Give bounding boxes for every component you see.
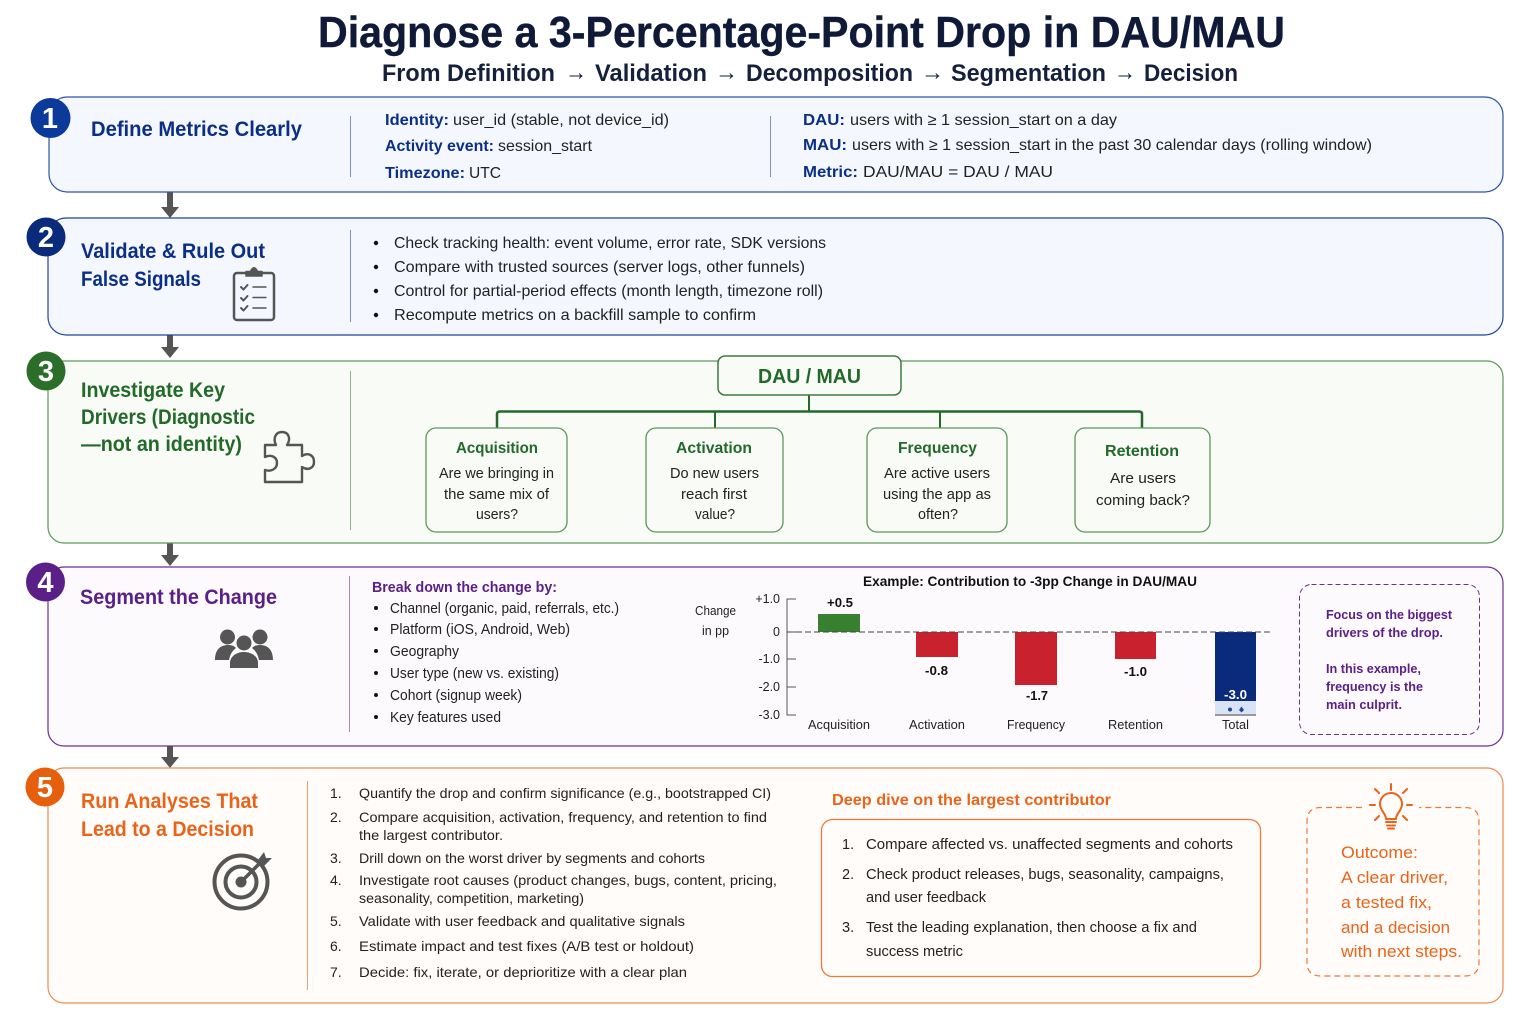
- subtitle: From Definition: [382, 60, 555, 87]
- bar: retention: Retention: [1108, 718, 1163, 732]
- icon: target with arrow: [214, 852, 272, 908]
- checklist bullets: Check tracking health: event volume, error rate, SDK versions: [394, 235, 826, 252]
- bar: frequency: -1.7: [1026, 689, 1048, 703]
- outcome callout: [1307, 784, 1479, 976]
- segmentation list: Cohort (signup week): [390, 688, 522, 704]
- definitions: DAU, MAU, metric: [803, 112, 1372, 181]
- icon: lightbulb: [1370, 784, 1412, 828]
- arrow: step 2 to 3: [161, 335, 179, 358]
- heading: False Signals: [81, 268, 201, 291]
- driver card: frequency: Frequency: [898, 440, 977, 457]
- heading: Segment the Change: [80, 586, 277, 609]
- step number 5: [26, 768, 64, 806]
- y axis: [755, 592, 796, 722]
- numbered analysis steps: [330, 785, 777, 980]
- numbered analysis steps: 2.: [330, 809, 342, 825]
- numbered analysis steps: Investigate root causes (product changes, bugs, content, pricing,: [359, 872, 777, 888]
- bar: activation: -0.8: [925, 664, 948, 678]
- definitions: DAU, MAU, metric: DAU/MAU = DAU / MAU: [863, 164, 1053, 181]
- callout: focus on biggest drivers: [1300, 584, 1480, 734]
- driver card: frequency: often?: [918, 506, 958, 523]
- driver card: activation: Do new users: [670, 465, 759, 482]
- step number 4: 4: [37, 567, 54, 599]
- bar: activation: [909, 632, 965, 732]
- outcome callout: Outcome:: [1341, 843, 1418, 862]
- numbered analysis steps: the largest contributor.: [359, 827, 503, 843]
- outcome callout: A clear driver,: [1341, 868, 1448, 887]
- callout: focus on biggest drivers: main culprit.: [1326, 697, 1402, 712]
- driver card: frequency: Are active users: [884, 465, 990, 482]
- icon: puzzle piece: [265, 432, 314, 482]
- deep dive box: 2.: [842, 867, 854, 883]
- y axis: -2.0: [758, 680, 780, 694]
- driver card: activation: [646, 428, 783, 532]
- outcome callout: a tested fix,: [1341, 893, 1432, 912]
- segmentation list: Key features used: [390, 710, 501, 726]
- bar: acquisition: +0.5: [827, 596, 853, 610]
- panel 2: validate: [26, 218, 1503, 335]
- bar: acquisition: [808, 596, 870, 732]
- title: Diagnose a 3-Percentage-Point Drop in DAU/MAU: [318, 8, 1285, 57]
- bar: acquisition: Acquisition: [808, 718, 870, 732]
- deep dive box: Test the leading explanation, then choose a fix and: [866, 920, 1197, 936]
- callout: focus on biggest drivers: In this example,: [1326, 661, 1421, 676]
- y axis: 0: [773, 625, 780, 639]
- heading: Drivers (Diagnostic: [81, 406, 255, 429]
- heading: —not an identity): [81, 433, 242, 456]
- deep dive heading: Deep dive on the largest contributor: [832, 792, 1111, 809]
- driver card: acquisition: Acquisition: [456, 440, 538, 457]
- callout: focus on biggest drivers: frequency is the: [1326, 679, 1423, 694]
- checklist bullets: Recompute metrics on a backfill sample to confirm: [394, 307, 756, 324]
- bar chart: contribution to change: [695, 573, 1271, 732]
- driver card: retention: coming back?: [1096, 492, 1190, 509]
- outcome callout: with next steps.: [1340, 942, 1462, 961]
- definitions: identity, event, timezone: session_start: [498, 138, 593, 155]
- bar: total: Total: [1222, 718, 1249, 732]
- subtitle: Validation: [595, 60, 707, 87]
- heading: Define Metrics Clearly: [91, 118, 302, 141]
- checklist bullets: [374, 235, 826, 324]
- checklist bullets: Control for partial-period effects (month length, timezone roll): [394, 283, 823, 300]
- definitions: identity, event, timezone: UTC: [469, 165, 501, 182]
- subtitle: →: [1114, 59, 1136, 86]
- definitions: DAU, MAU, metric: users with ≥ 1 session_start in the past 30 calendar days (rolling window): [852, 137, 1372, 154]
- numbered analysis steps: Decide: fix, iterate, or deprioritize with a clear plan: [359, 964, 687, 980]
- numbered analysis steps: 7.: [330, 964, 342, 980]
- step number 2: 2: [38, 222, 54, 254]
- segmentation list: Geography: [390, 644, 460, 660]
- definitions: DAU, MAU, metric: DAU:: [803, 112, 845, 129]
- numbered analysis steps: 3.: [330, 850, 342, 866]
- definitions: DAU, MAU, metric: Metric:: [803, 164, 858, 181]
- heading: [81, 379, 255, 456]
- tree root: DAU / MAU: DAU / MAU: [758, 366, 861, 388]
- numbered analysis steps: Drill down on the worst driver by segments and cohorts: [359, 850, 705, 866]
- deep dive box: success metric: [866, 944, 963, 960]
- panel 4: segment: [26, 562, 1503, 746]
- heading: [81, 790, 258, 841]
- numbered analysis steps: 4.: [330, 872, 342, 888]
- bar: total: -3.0: [1224, 688, 1247, 702]
- driver card: acquisition: the same mix of: [444, 486, 550, 503]
- deep dive box: and user feedback: [866, 890, 987, 906]
- bar: frequency: Frequency: [1007, 718, 1066, 732]
- driver card: activation: reach first: [681, 486, 748, 503]
- bar: total: [1215, 632, 1256, 732]
- definitions: DAU, MAU, metric: MAU:: [803, 137, 847, 154]
- driver card: acquisition: Are we bringing in: [439, 465, 554, 482]
- driver card: retention: [1075, 428, 1210, 532]
- y axis: -1.0: [758, 652, 780, 666]
- driver card: activation: value?: [695, 506, 735, 523]
- arrow: step 4 to 5: [161, 746, 179, 768]
- numbered analysis steps: Quantify the drop and confirm significance (e.g., bootstrapped CI): [359, 785, 771, 801]
- deep dive box: Check product releases, bugs, seasonality, campaigns,: [866, 867, 1224, 883]
- chart title: Example: Contribution to -3pp Change in DAU/MAU: [863, 573, 1197, 589]
- driver card: acquisition: [426, 428, 567, 532]
- numbered analysis steps: 1.: [330, 785, 342, 801]
- segmentation list: Channel (organic, paid, referrals, etc.): [390, 601, 619, 617]
- y axis: -3.0: [758, 708, 780, 722]
- tree connectors: [497, 395, 1142, 429]
- subtitle: →: [565, 59, 587, 86]
- definitions: identity, event, timezone: Timezone:: [385, 165, 465, 182]
- step number 3: 3: [38, 356, 54, 388]
- step number 4: [26, 562, 65, 602]
- step number 1: [30, 98, 70, 138]
- bar: activation: Activation: [909, 718, 965, 732]
- bar: retention: -1.0: [1124, 665, 1147, 679]
- segmentation list: [372, 580, 619, 726]
- numbered analysis steps: Estimate impact and test fixes (A/B test or holdout): [359, 938, 694, 954]
- driver card: acquisition: users?: [476, 506, 518, 523]
- y axis: +1.0: [755, 592, 780, 606]
- segmentation list: Platform (iOS, Android, Web): [390, 622, 570, 638]
- outcome callout: and a decision: [1341, 918, 1450, 937]
- step number 5: 5: [37, 772, 53, 804]
- segmentation list: Break down the change by:: [372, 580, 557, 596]
- heading: [81, 240, 265, 291]
- definitions: DAU, MAU, metric: users with ≥ 1 session_start on a day: [850, 112, 1117, 129]
- arrow: step 3 to 4: [161, 543, 179, 566]
- y axis title: in pp: [702, 624, 729, 638]
- heading: Investigate Key: [81, 379, 225, 402]
- deep dive box: Compare affected vs. unaffected segments and cohorts: [866, 837, 1233, 853]
- definitions: identity, event, timezone: Identity:: [385, 112, 449, 129]
- driver card: activation: Activation: [676, 440, 752, 457]
- panel 3: investigate drivers: [26, 352, 1503, 543]
- numbered analysis steps: Validate with user feedback and qualitative signals: [359, 913, 685, 929]
- heading: Validate & Rule Out: [81, 240, 265, 263]
- y axis title: [695, 604, 736, 638]
- driver card: retention: Retention: [1105, 443, 1179, 460]
- y axis title: Change: [695, 604, 736, 618]
- driver card: frequency: [867, 428, 1007, 532]
- bar: frequency: [1007, 632, 1066, 732]
- heading: Run Analyses That: [81, 790, 258, 813]
- subtitle: [382, 59, 1238, 87]
- icon: group of people: [215, 630, 273, 668]
- numbered analysis steps: 5.: [330, 913, 342, 929]
- definitions: identity, event, timezone: [385, 112, 669, 182]
- panel 5: run analyses: [26, 768, 1503, 1003]
- bar: retention: [1108, 632, 1163, 732]
- numbered analysis steps: Compare acquisition, activation, frequency, and retention to find: [359, 809, 767, 825]
- step number 2: [26, 218, 66, 256]
- arrow: step 1 to 2: [161, 192, 179, 218]
- definitions: identity, event, timezone: user_id (stable, not device_id): [453, 112, 669, 129]
- deep dive box: [822, 820, 1260, 976]
- subtitle: →: [715, 59, 738, 86]
- deep dive box: 3.: [842, 920, 854, 936]
- step number 1: 1: [42, 103, 58, 135]
- callout: focus on biggest drivers: drivers of the drop.: [1326, 625, 1443, 640]
- subtitle: →: [921, 59, 944, 86]
- callout: focus on biggest drivers: Focus on the biggest: [1326, 607, 1453, 622]
- subtitle: Segmentation: [951, 60, 1106, 87]
- tree root: DAU / MAU: [718, 356, 901, 395]
- deep dive box: 1.: [842, 837, 854, 853]
- numbered analysis steps: 6.: [330, 938, 342, 954]
- driver card: frequency: using the app as: [883, 486, 991, 503]
- panel 1: define metrics: [30, 97, 1503, 192]
- icon: clipboard checklist: [234, 268, 274, 320]
- checklist bullets: Compare with trusted sources (server logs, other funnels): [394, 259, 805, 276]
- subtitle: Decision: [1144, 60, 1238, 87]
- numbered analysis steps: seasonality, competition, marketing): [359, 890, 584, 906]
- definitions: identity, event, timezone: Activity event:: [385, 138, 494, 155]
- subtitle: Decomposition: [746, 60, 913, 87]
- driver card: retention: Are users: [1110, 470, 1176, 487]
- step number 3: [26, 352, 66, 390]
- segmentation list: User type (new vs. existing): [390, 666, 559, 682]
- heading: Lead to a Decision: [81, 818, 254, 841]
